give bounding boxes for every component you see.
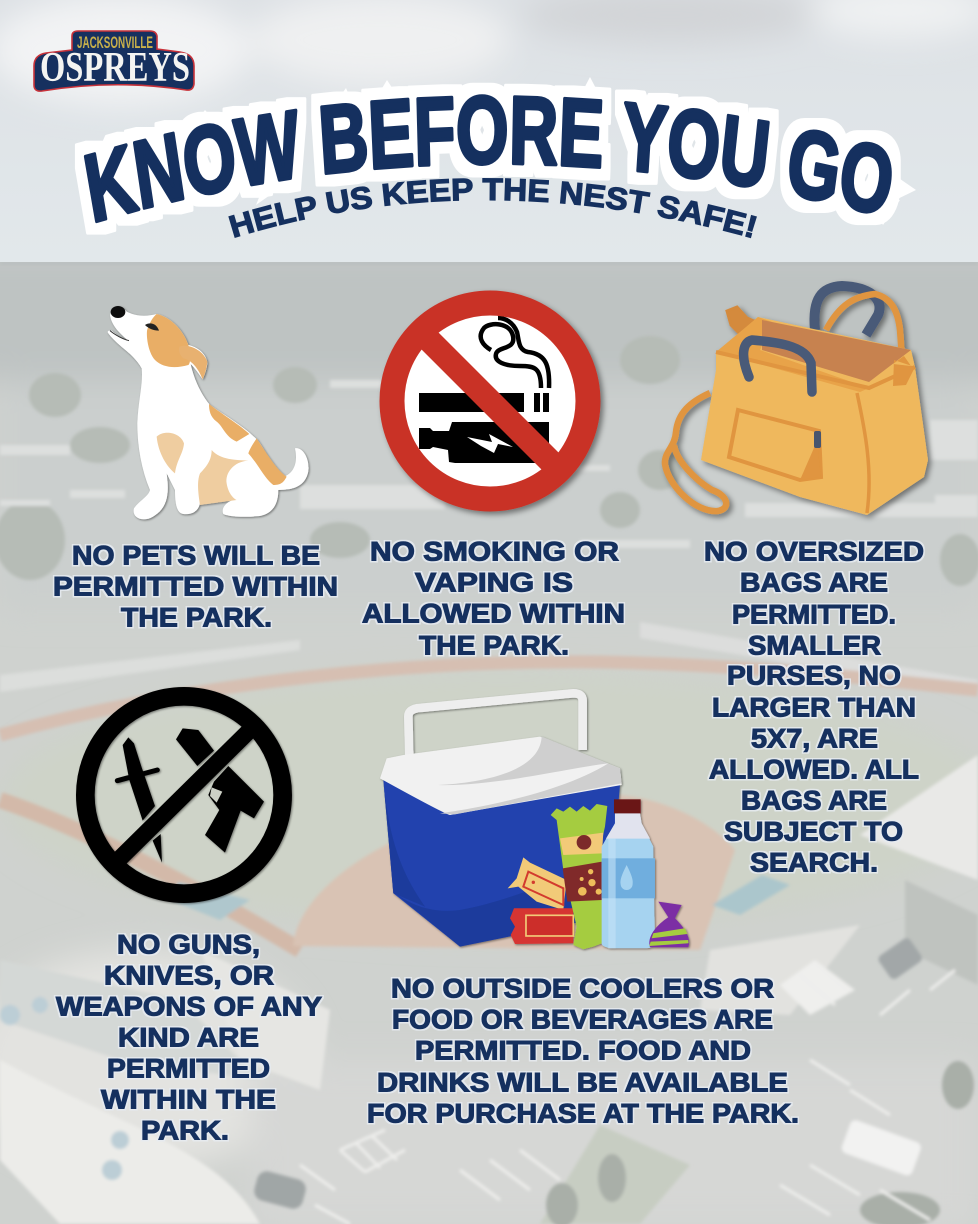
logo: Jacksonville Ospreys [34,31,194,91]
smoke [481,318,549,388]
bag opening [716,317,869,392]
pocket [729,410,821,480]
text: oversized bags rule: LARGER THAN [712,692,916,722]
stadium buildings [860,755,978,880]
gun [176,728,264,853]
green snack bar [551,804,607,949]
text: no pets rule: NO PETS WILL BE [72,540,320,570]
text: no weapons rule: KNIVES, OR [104,960,274,990]
town: tree clumps and roofs [0,336,978,586]
text: no weapons rule: WITHIN THE [101,1084,276,1114]
text: no weapons rule: KIND ARE [118,1022,259,1052]
text: oversized bags rule: PERMITTED. [732,600,896,630]
bag strap [665,393,726,511]
text: no weapons rule: WEAPONS OF ANY [56,992,322,1022]
icon: no weapons sign [85,696,283,894]
text: no smoking rule: NO SMOKING OR [370,536,619,566]
logo: Jacksonville Ospreys: JACKSONVILLE [77,33,153,52]
text: no smoking rule: THE PARK. [419,630,569,660]
icon: no smoking or vaping sign [392,303,588,499]
title lettering: KNOW BEFORE YOU GO [75,82,901,234]
text: no smoking rule: VAPING IS [415,568,573,598]
text: no outside food rule [367,974,799,1128]
text: no pets rule: PERMITTED WITHIN [53,572,338,602]
text: no weapons rule: PERMITTED [107,1054,270,1084]
text: no outside food rule: FOOD OR BEVERAGES ARE [392,1004,773,1034]
cooler body [383,780,620,947]
text: oversized bags rule [704,536,924,878]
text: oversized bags rule: 5X7, ARE [751,724,878,754]
text: oversized bags rule: BAGS ARE [741,786,887,816]
logo: Jacksonville Ospreys: OSPREYS [40,45,190,91]
text: no smoking rule [362,536,625,660]
parked vehicles [840,1119,923,1177]
text: no outside food rule: PERMITTED. FOOD AND [415,1036,751,1066]
knife [117,737,162,863]
text: oversized bags rule: SUBJECT TO [724,816,903,846]
umbrellas [0,997,129,1180]
text: oversized bags rule: SMALLER [748,630,881,660]
text: oversized bags rule: PURSES, NO [727,660,901,690]
icon: dog [108,306,309,519]
text: no outside food rule: NO OUTSIDE COOLERS OR [391,974,774,1004]
icon: oversized bag [665,286,928,515]
text: no outside food rule: DRINKS WILL BE AVAILABLE [377,1068,788,1098]
text: oversized bags rule: NO OVERSIZED [704,536,924,566]
title: Know Before You Go [75,78,916,234]
text: no weapons rule: PARK. [141,1116,229,1146]
text: no pets rule: THE PARK. [121,602,272,632]
text: no pets rule [53,540,338,632]
text: oversized bags rule: BAGS ARE [740,568,888,598]
outfield warning track [0,662,978,735]
text: no weapons rule: NO GUNS, [117,930,260,960]
icon: cooler with snacks and bottle [380,693,689,949]
text: no weapons rule [56,930,322,1146]
cooler handle [408,693,583,783]
parking lines [300,962,955,1224]
cigarette [419,393,549,412]
parking islands and trees [540,1125,690,1224]
front handle [744,340,812,392]
wrapped candy [649,902,689,947]
back handles [814,286,880,335]
title burst spikes [192,77,916,225]
yellow snack bar [508,857,567,910]
infield [293,795,735,950]
text: oversized bags rule: SEARCH. [750,848,878,878]
water bottle [602,799,655,948]
text: no smoking rule: ALLOWED WITHIN [362,598,625,628]
text: oversized bags rule: ALLOWED. ALL [709,754,919,784]
text: no outside food rule: FOR PURCHASE AT THE PARK. [367,1098,799,1128]
vape device [419,422,549,463]
red snack bar [510,908,573,944]
subtitle: Help us keep the nest safe: HELP US KEEP THE NEST SAFE! [228,178,757,238]
prohibition ring and slash [392,303,588,499]
cooler lid [380,737,622,815]
